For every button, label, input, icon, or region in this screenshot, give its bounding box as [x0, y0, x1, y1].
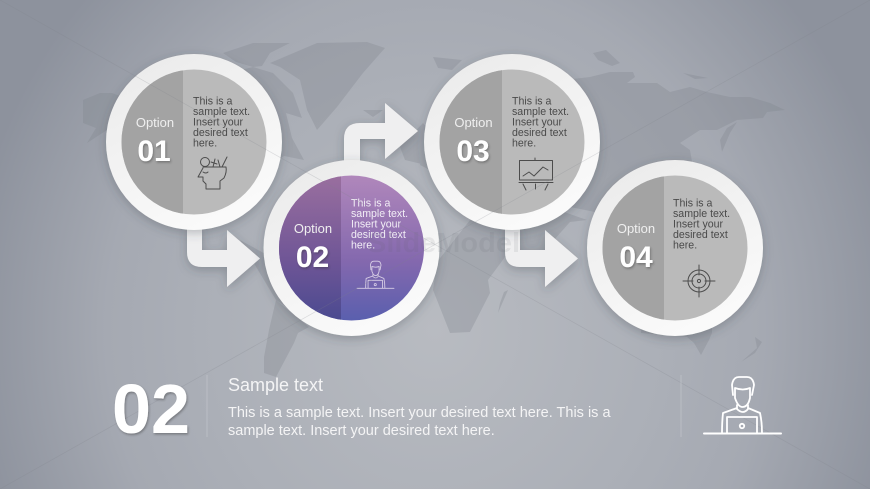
text: option 03 description: This is a: [512, 96, 552, 108]
arrow: 02 to 03: [344, 103, 418, 164]
text: option 01 description: here.: [193, 137, 217, 149]
text: option 02 description: sample text.: [351, 208, 408, 220]
text block: sample text: [228, 375, 611, 439]
text: option 04 description: This is a: [673, 198, 713, 210]
arrow: 01 to 02: [187, 226, 260, 287]
watermark: SlideModel: [367, 227, 520, 258]
text: option 02 description: This is a: [351, 198, 391, 210]
large number 02: 02: [112, 370, 190, 448]
panel: option 04: [587, 160, 763, 336]
world map: [83, 42, 785, 377]
panel: option 03: [424, 54, 600, 230]
text: option 03 description: sample text.: [512, 106, 569, 118]
number: 01: 01: [137, 135, 171, 168]
text: option 02 description: desired text: [351, 229, 406, 241]
icon: head with ideas: [198, 157, 227, 189]
body text: sample text. Insert your desired text here.: [228, 423, 495, 439]
text: option 03 description: here.: [512, 137, 536, 149]
arrow: 03 to 04: [505, 226, 578, 287]
text: option 02 description: Insert your: [351, 218, 402, 230]
label: option 01: Option: [136, 115, 174, 130]
number: 03: 03: [456, 135, 490, 168]
text: option 01 description: desired text: [193, 127, 248, 139]
text: option 04 description: here.: [673, 239, 697, 251]
text: option 01 description: Insert your: [193, 116, 244, 128]
icon: chart on easel: [519, 158, 553, 190]
body text: This is a sample text. Insert your desired text here. This is a: [228, 405, 611, 421]
text: option 01 description: This is a: [193, 96, 233, 108]
text: option 04 description: sample text.: [673, 208, 730, 220]
number: 02: 02: [296, 241, 329, 274]
text: option 02 description: here.: [351, 239, 375, 251]
panel: option 02 (active): [264, 160, 440, 336]
text: option 03 description: desired text: [512, 127, 567, 139]
text: option 01 description: sample text.: [193, 106, 250, 118]
panel: option 01: [106, 54, 282, 230]
label: option 04: Option: [617, 221, 655, 236]
icon: target: [683, 265, 715, 297]
icon: person at laptop, large: [704, 377, 781, 434]
heading: sample text: Sample text: [228, 375, 323, 395]
text: option 04 description: Insert your: [673, 218, 724, 230]
text: option 03 description: Insert your: [512, 116, 563, 128]
number: 04: 04: [619, 241, 653, 274]
icon: person at laptop, small: [357, 261, 394, 288]
label: option 02: Option: [294, 221, 332, 236]
text: option 04 description: desired text: [673, 229, 728, 241]
label: option 03: Option: [454, 115, 493, 130]
